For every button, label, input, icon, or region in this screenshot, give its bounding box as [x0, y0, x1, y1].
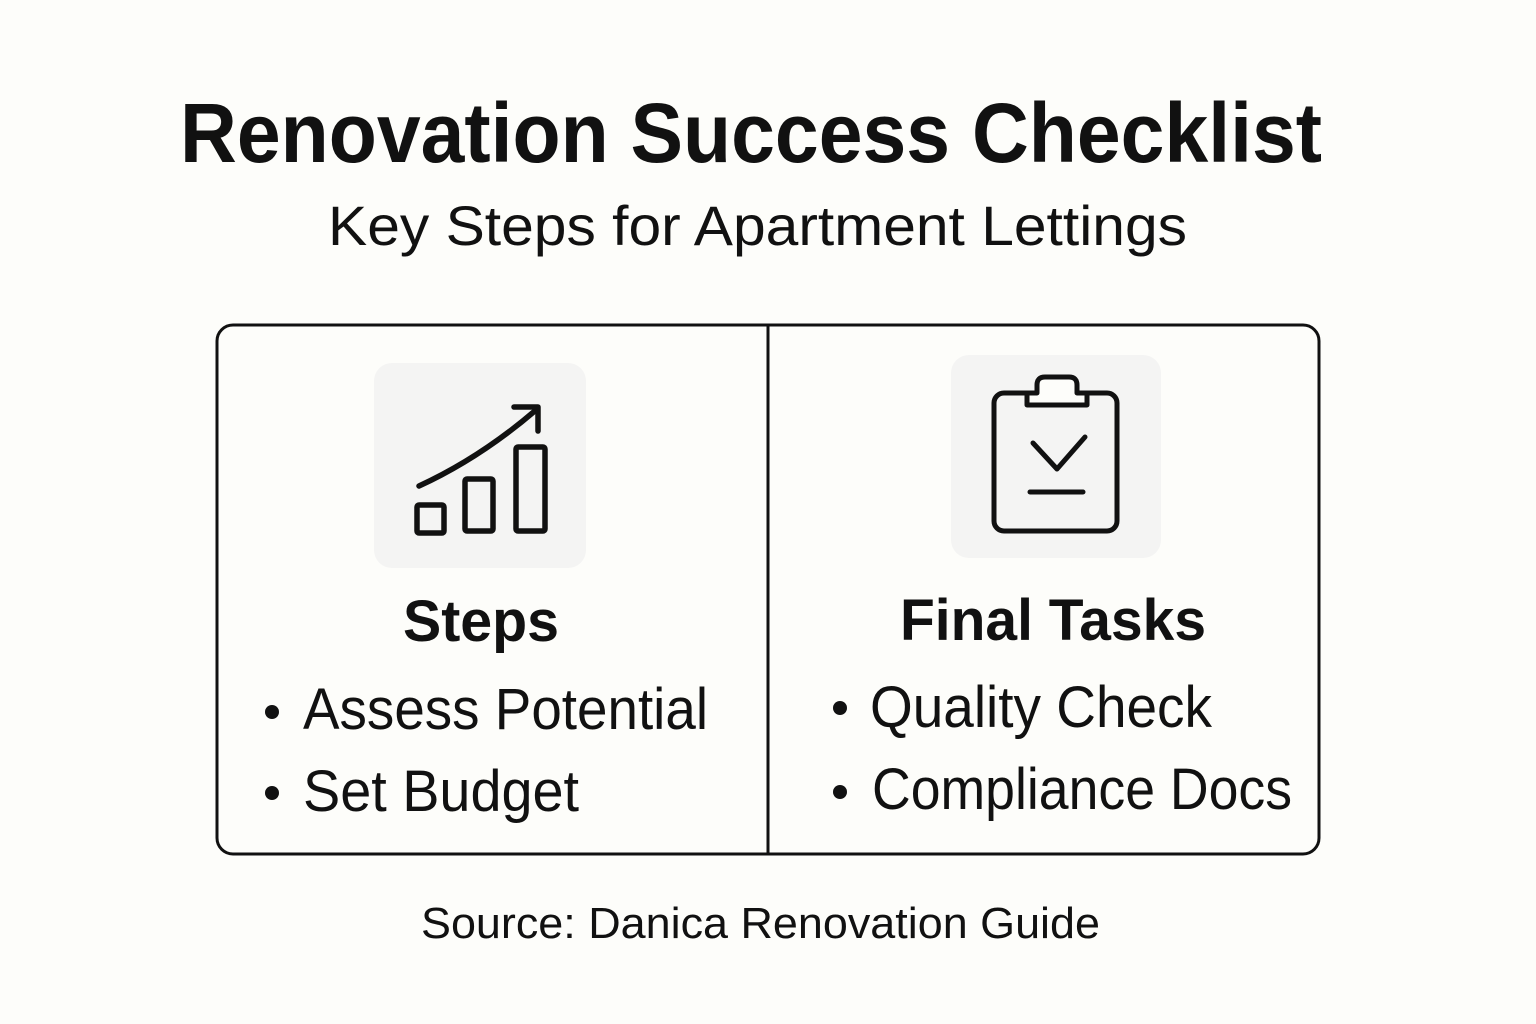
bullet list: final tasks: Quality Check	[870, 675, 1213, 740]
subtitle: Key Steps for Apartment Lettings	[328, 194, 1187, 257]
heading: steps: Steps	[403, 589, 559, 654]
panel: checklist box	[217, 325, 1319, 854]
source note: Source: Danica Renovation Guide	[421, 899, 1100, 948]
icon: growth chart	[374, 363, 586, 568]
bullet list: steps: Assess Potential	[303, 677, 708, 742]
bullet list: final tasks: Compliance Docs	[872, 757, 1292, 822]
bullet list: final tasks	[833, 675, 1292, 822]
heading: final tasks: Final Tasks	[900, 588, 1206, 653]
panel: final tasks	[833, 355, 1292, 822]
icon: clipboard check	[951, 355, 1161, 558]
panel: steps	[265, 363, 708, 824]
bullet list: steps	[265, 677, 708, 824]
title: Renovation Success Checklist	[180, 86, 1322, 180]
bullet list: steps: Set Budget	[303, 759, 579, 824]
